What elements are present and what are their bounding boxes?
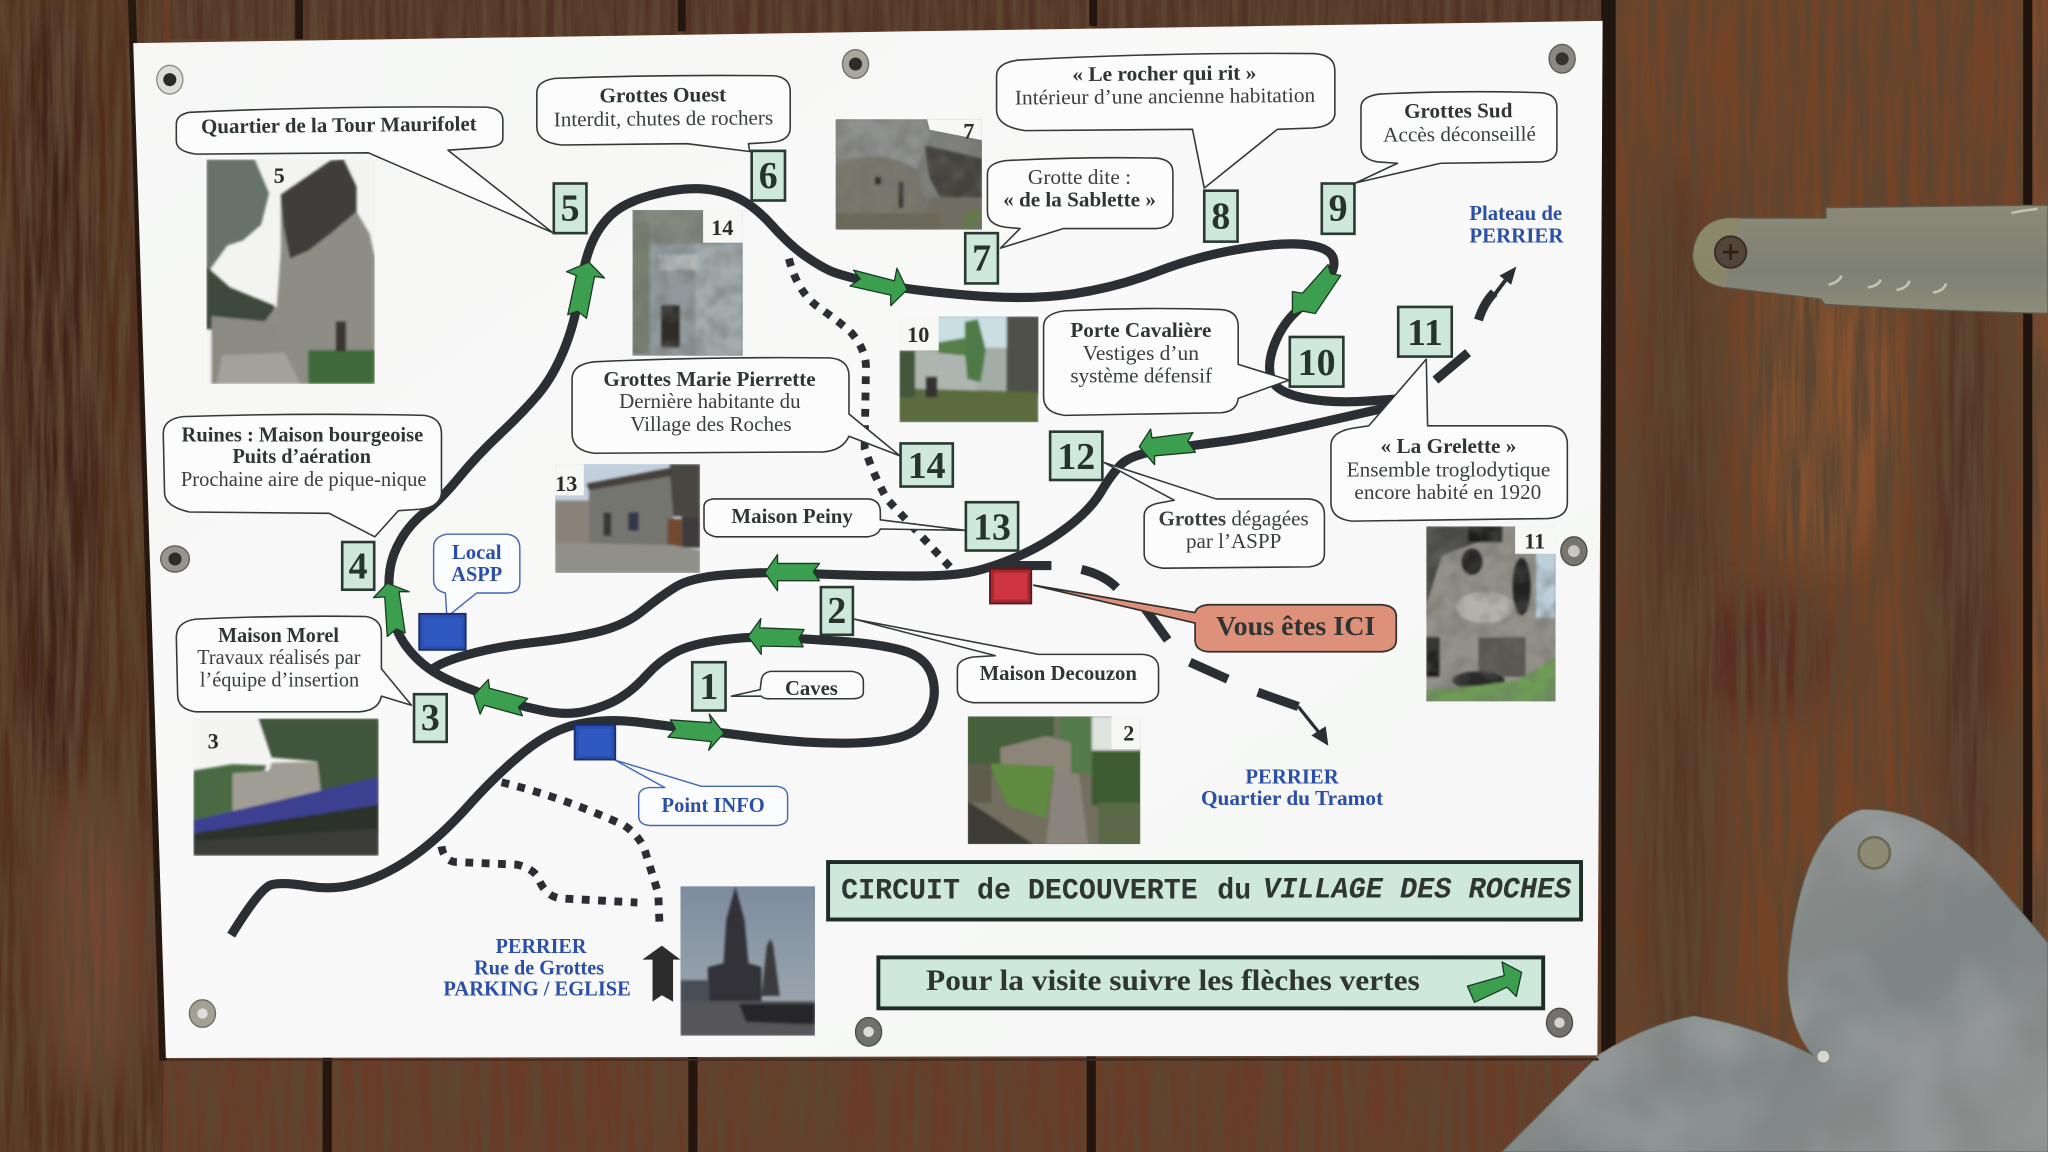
callout: Caves: Caves <box>785 676 838 700</box>
callout: Grotte de la Sablette: Grotte dite : <box>1028 165 1131 189</box>
title banner: CIRCUIT de DECOUVERTE <box>841 875 1198 909</box>
callout: Grottes Marie Pierrette: Village des Roches <box>630 412 792 436</box>
title banner <box>828 862 1581 920</box>
number box 5 <box>554 184 586 233</box>
callout: Grottes Sud: Grottes Sud <box>1404 98 1513 123</box>
label: Perrier Rue de Grottes Parking Eglise: PARKING / EGLISE <box>443 976 631 1000</box>
number box 1: 1 <box>699 666 718 708</box>
callout: Quartier de la Tour Maurifolet: Quartier de la Tour Maurifolet <box>201 111 477 138</box>
trail: return route <box>428 408 1387 673</box>
number box 5: 5 <box>561 188 580 230</box>
callout: Porte Cavaliere: Vestiges d’un <box>1083 341 1200 365</box>
callout: Point INFO <box>615 760 788 825</box>
callout: Grottes Ouest: Interdit, chutes de rochers <box>554 105 773 131</box>
number box 2: 2 <box>827 590 846 632</box>
callout: Grottes Marie Pierrette: Grottes Marie Pierrette <box>603 367 816 391</box>
photo numbers: 11 <box>1524 529 1545 554</box>
title banner: VILLAGE DES ROCHES <box>1263 873 1571 907</box>
callout: Le rocher qui rit: « Le rocher qui rit » <box>1072 61 1257 86</box>
legend banner: follow the green arrows <box>878 957 1543 1008</box>
callout: Grotte de la Sablette: « de la Sablette » <box>1003 187 1156 211</box>
callout: Maison Peiny: Maison Peiny <box>731 504 853 528</box>
callout: Porte Cavaliere: système défensif <box>1070 364 1212 388</box>
label: Plateau de Perrier: PERRIER <box>1469 223 1564 247</box>
number box 11 <box>1398 307 1452 357</box>
photo 3: Maison Morel <box>193 718 379 856</box>
photo numbers: 7 <box>963 118 974 143</box>
number box 9 <box>1322 184 1354 234</box>
marker: you are here red square <box>990 569 1031 603</box>
number box 2 <box>821 587 853 635</box>
callout: Ruines Maison bourgeoise: Prochaine aire de pique-nique <box>181 467 426 491</box>
number box 13 <box>966 502 1018 551</box>
callout: Grotte de la Sablette <box>987 158 1173 248</box>
callout: La Grelette <box>1331 359 1567 521</box>
callout: Grottes Sud <box>1356 92 1557 183</box>
photo 11: La Grelette rock <box>1426 526 1556 702</box>
callout: Caves <box>731 671 863 700</box>
callout: Porte Cavaliere <box>1044 309 1289 415</box>
callout: Maison Peiny <box>704 499 965 537</box>
number box 4: 4 <box>349 546 368 588</box>
photo: church of Perrier <box>680 886 815 1036</box>
number box 12: 12 <box>1057 436 1095 478</box>
callout: Ruines Maison bourgeoise: Puits d’aération <box>232 444 371 468</box>
callout: Grottes Sud: Accès déconseillé <box>1383 122 1536 147</box>
number box 1 <box>692 662 726 711</box>
marker: Local ASPP blue square <box>419 614 466 650</box>
green arrows along the circuit <box>374 262 1341 750</box>
trail: main route loop <box>231 189 1407 935</box>
label: Perrier Rue de Grottes Parking Eglise <box>443 934 631 1000</box>
callout: Grottes Ouest <box>537 75 790 152</box>
panel screws <box>157 44 1587 1046</box>
callout: Le rocher qui rit <box>997 53 1335 188</box>
number box 7: 7 <box>972 237 991 279</box>
photo numbers: 14 <box>711 215 733 240</box>
callout: Local ASPP: Local <box>452 540 502 564</box>
label: Perrier Rue de Grottes Parking Eglise: PERRIER <box>496 934 587 958</box>
callout: Maison Decouzon <box>854 619 1159 703</box>
metal hinge strap <box>1693 205 2048 313</box>
callout: Local ASPP <box>434 534 520 614</box>
callout: Grottes Marie Pierrette: Dernière habitante du <box>619 389 801 413</box>
number box 3: 3 <box>421 697 440 739</box>
callout: Vous etes ICI <box>1033 585 1396 652</box>
photo numbers: 10 <box>907 322 929 347</box>
number box 10: 10 <box>1298 342 1336 384</box>
number box 10 <box>1290 337 1343 387</box>
photo numbers: 2 <box>1123 721 1134 746</box>
panel board <box>133 21 1603 1061</box>
label: Perrier Quartier du Tramot <box>1201 765 1383 810</box>
label: Plateau de Perrier: Plateau de <box>1469 201 1562 225</box>
callout: Maison Morel: Travaux réalisés par <box>197 645 361 669</box>
callout: Maison Decouzon: Maison Decouzon <box>980 661 1137 685</box>
number box 14: 14 <box>908 445 946 487</box>
number box 7 <box>965 233 998 283</box>
number box 6 <box>752 151 785 200</box>
callout: La Grelette: Ensemble troglodytique <box>1347 458 1550 482</box>
callout: La Grelette: encore habité en 1920 <box>1354 480 1541 504</box>
number box 6: 6 <box>759 155 778 197</box>
photo 13: Maison Peiny <box>555 464 700 573</box>
dotted path: upper shortcut <box>789 259 953 571</box>
callout: Maison Morel: Maison Morel <box>218 623 339 647</box>
number box 12 <box>1050 432 1102 480</box>
photo 10: Porte Cavaliere <box>900 316 1038 422</box>
photo 2: Maison Decouzon <box>968 716 1140 844</box>
title banner: du <box>1217 875 1251 909</box>
dashed route to Quartier du Tramot <box>1081 569 1328 746</box>
label: Plateau de Perrier <box>1469 201 1564 247</box>
label: Perrier Rue de Grottes Parking Eglise: Rue de Grottes <box>474 955 604 979</box>
number box 8: 8 <box>1211 196 1230 238</box>
number box 3 <box>414 694 447 742</box>
label: Perrier Quartier du Tramot: PERRIER <box>1245 765 1340 789</box>
marker: Point INFO blue square <box>575 725 615 760</box>
zinc cut-out shape <box>1502 810 2048 1152</box>
callout: Point INFO: Point INFO <box>662 793 765 817</box>
callout: Ruines Maison bourgeoise: Ruines : Maison bourgeoise <box>182 422 423 446</box>
callout: Vous etes ICI: Vous êtes ICI <box>1216 611 1375 641</box>
photo numbers: 5 <box>274 163 285 188</box>
callout: Grottes degagees <box>1104 462 1324 568</box>
photo numbers: 13 <box>555 471 577 496</box>
callout: Grottes degagees: Grottes dégagées <box>1159 507 1309 531</box>
callout: Quartier de la Tour Maurifolet <box>176 107 552 232</box>
callout: Ruines Maison bourgeoise <box>163 414 441 537</box>
legend banner: follow the green arrows: Pour la visite suivre les flèches vertes <box>926 964 1420 997</box>
callout: La Grelette: « La Grelette » <box>1381 434 1516 458</box>
photo numbers: 3 <box>208 728 219 753</box>
callout: Local ASPP: ASPP <box>451 562 502 586</box>
number box 4 <box>342 542 374 590</box>
dotted paths: from church <box>441 782 660 927</box>
number box 8 <box>1204 191 1238 242</box>
arrow: black entry arrow <box>642 946 680 1002</box>
callout: Grottes Marie Pierrette <box>572 358 900 456</box>
photo 7: Grotte de la Sablette <box>836 119 982 230</box>
label: Perrier Quartier du Tramot: Quartier du Tramot <box>1201 786 1383 810</box>
callout: Maison Morel <box>176 616 411 712</box>
number box 14 <box>901 443 953 487</box>
callout: Maison Morel: l’équipe d’insertion <box>200 667 360 691</box>
dashed route to Plateau de Perrier <box>1435 266 1516 380</box>
callout: Grottes degagees: par l’ASPP <box>1186 529 1281 553</box>
number box 11: 11 <box>1407 312 1443 354</box>
number box 13: 13 <box>973 506 1011 548</box>
photo numbers <box>208 118 1545 753</box>
photo 5: Tour Maurifolet <box>206 159 375 384</box>
callout: Porte Cavaliere: Porte Cavalière <box>1070 318 1211 342</box>
number box 9: 9 <box>1329 188 1348 230</box>
photo 14: Grotte Marie Pierrette <box>632 210 743 356</box>
callout: Le rocher qui rit: Intérieur d’une ancienne habitation <box>1015 83 1316 109</box>
callout: Grottes Ouest: Grottes Ouest <box>599 82 726 107</box>
